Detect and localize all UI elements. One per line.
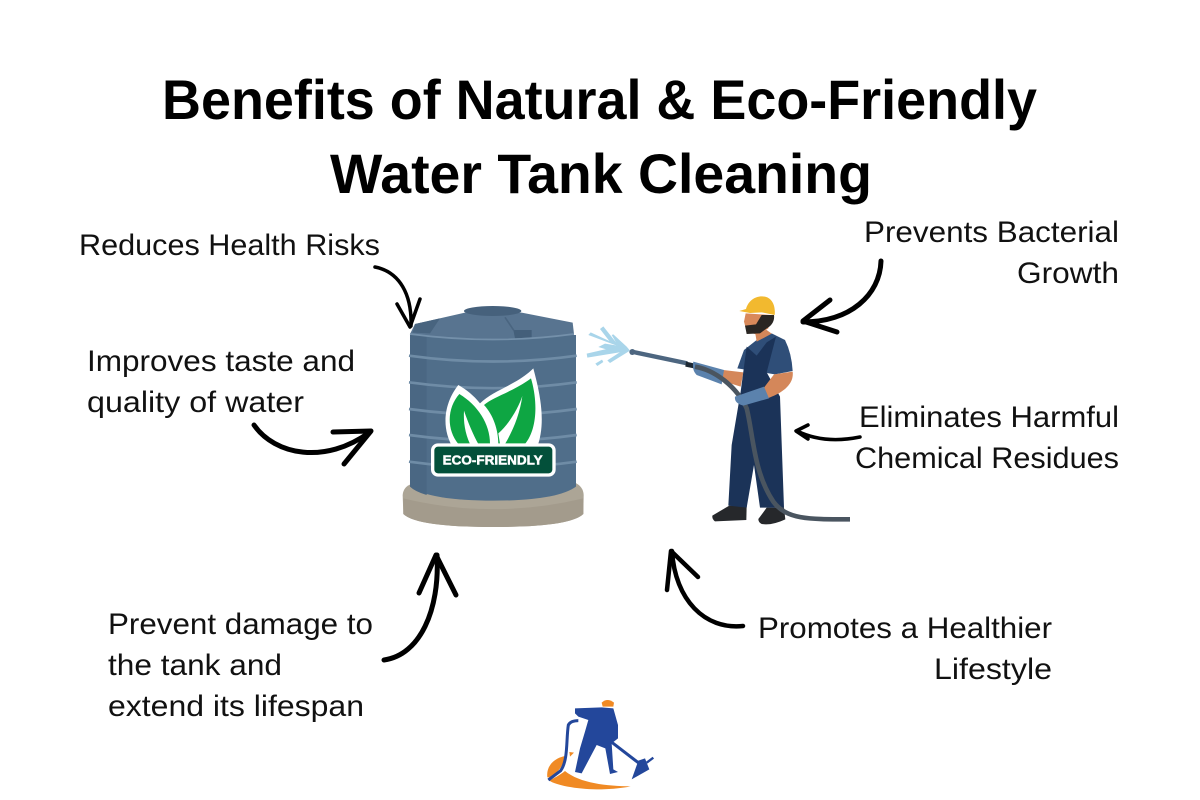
arrow: bacterial growth to worker: [803, 261, 881, 332]
text: promotes a healthier lifestyle: [758, 612, 1052, 686]
text: prevent damage to the tank: Prevent damage to: [108, 608, 373, 641]
text: prevents bacterial growth: Growth: [1017, 257, 1119, 290]
water spray: [587, 326, 630, 366]
text: reduces health risks: Reduces Health Risks: [79, 229, 380, 262]
left glove: [693, 362, 724, 384]
text: eliminates harmful chemical residues: Chemical Residues: [855, 442, 1119, 475]
text: promotes a healthier lifestyle: Lifestyle: [934, 653, 1052, 686]
right glove: [735, 387, 769, 406]
title: Water Tank Cleaning: [330, 142, 872, 205]
badge: eco-friendly: [433, 445, 554, 475]
icon: water tank: [403, 306, 584, 527]
shirt: [737, 333, 793, 374]
arrow: taste and quality to tank: [254, 425, 371, 464]
spray wand: [632, 352, 687, 363]
left arm: [723, 370, 743, 387]
icon: eco leaves: [445, 368, 542, 448]
text: prevents bacterial growth: Prevents Bacterial: [864, 216, 1119, 249]
text: prevent damage to the tank: the tank and: [108, 649, 282, 682]
text: prevents bacterial growth: [864, 216, 1119, 290]
boots: [712, 506, 747, 521]
text: prevent damage to the tank: extend its lifespan: [108, 690, 364, 723]
title: [162, 68, 1037, 205]
text: promotes a healthier lifestyle: Promotes a Healthier: [758, 612, 1052, 645]
hose: [695, 367, 850, 519]
arrow: chemical residues to worker: [796, 425, 860, 440]
hard hat: [739, 296, 775, 315]
right arm: [764, 372, 793, 398]
title: Benefits of Natural & Eco-Friendly: [162, 68, 1037, 131]
logo: cleaning worker: [547, 700, 653, 789]
arrow: health risks to tank: [375, 267, 420, 327]
icon: worker with pressure washer: [587, 296, 850, 524]
head: [744, 313, 771, 335]
text: eliminates harmful chemical residues: Eliminates Harmful: [859, 401, 1119, 434]
text: improves taste and quality: Improves taste and: [87, 345, 355, 378]
overalls: [728, 337, 784, 508]
beard and hair: [745, 315, 774, 334]
neck: [755, 330, 772, 342]
text: eliminates harmful chemical residues: [855, 401, 1119, 475]
text: improves taste and quality: quality of water: [87, 386, 304, 419]
text: improves taste and quality: [87, 345, 355, 419]
text: prevent damage to the tank: [108, 608, 373, 723]
arrow: prevent damage to tank: [384, 555, 456, 660]
arrow: healthier lifestyle to worker: [667, 551, 743, 626]
badge: eco-friendly: ECO-FRIENDLY: [443, 453, 543, 468]
